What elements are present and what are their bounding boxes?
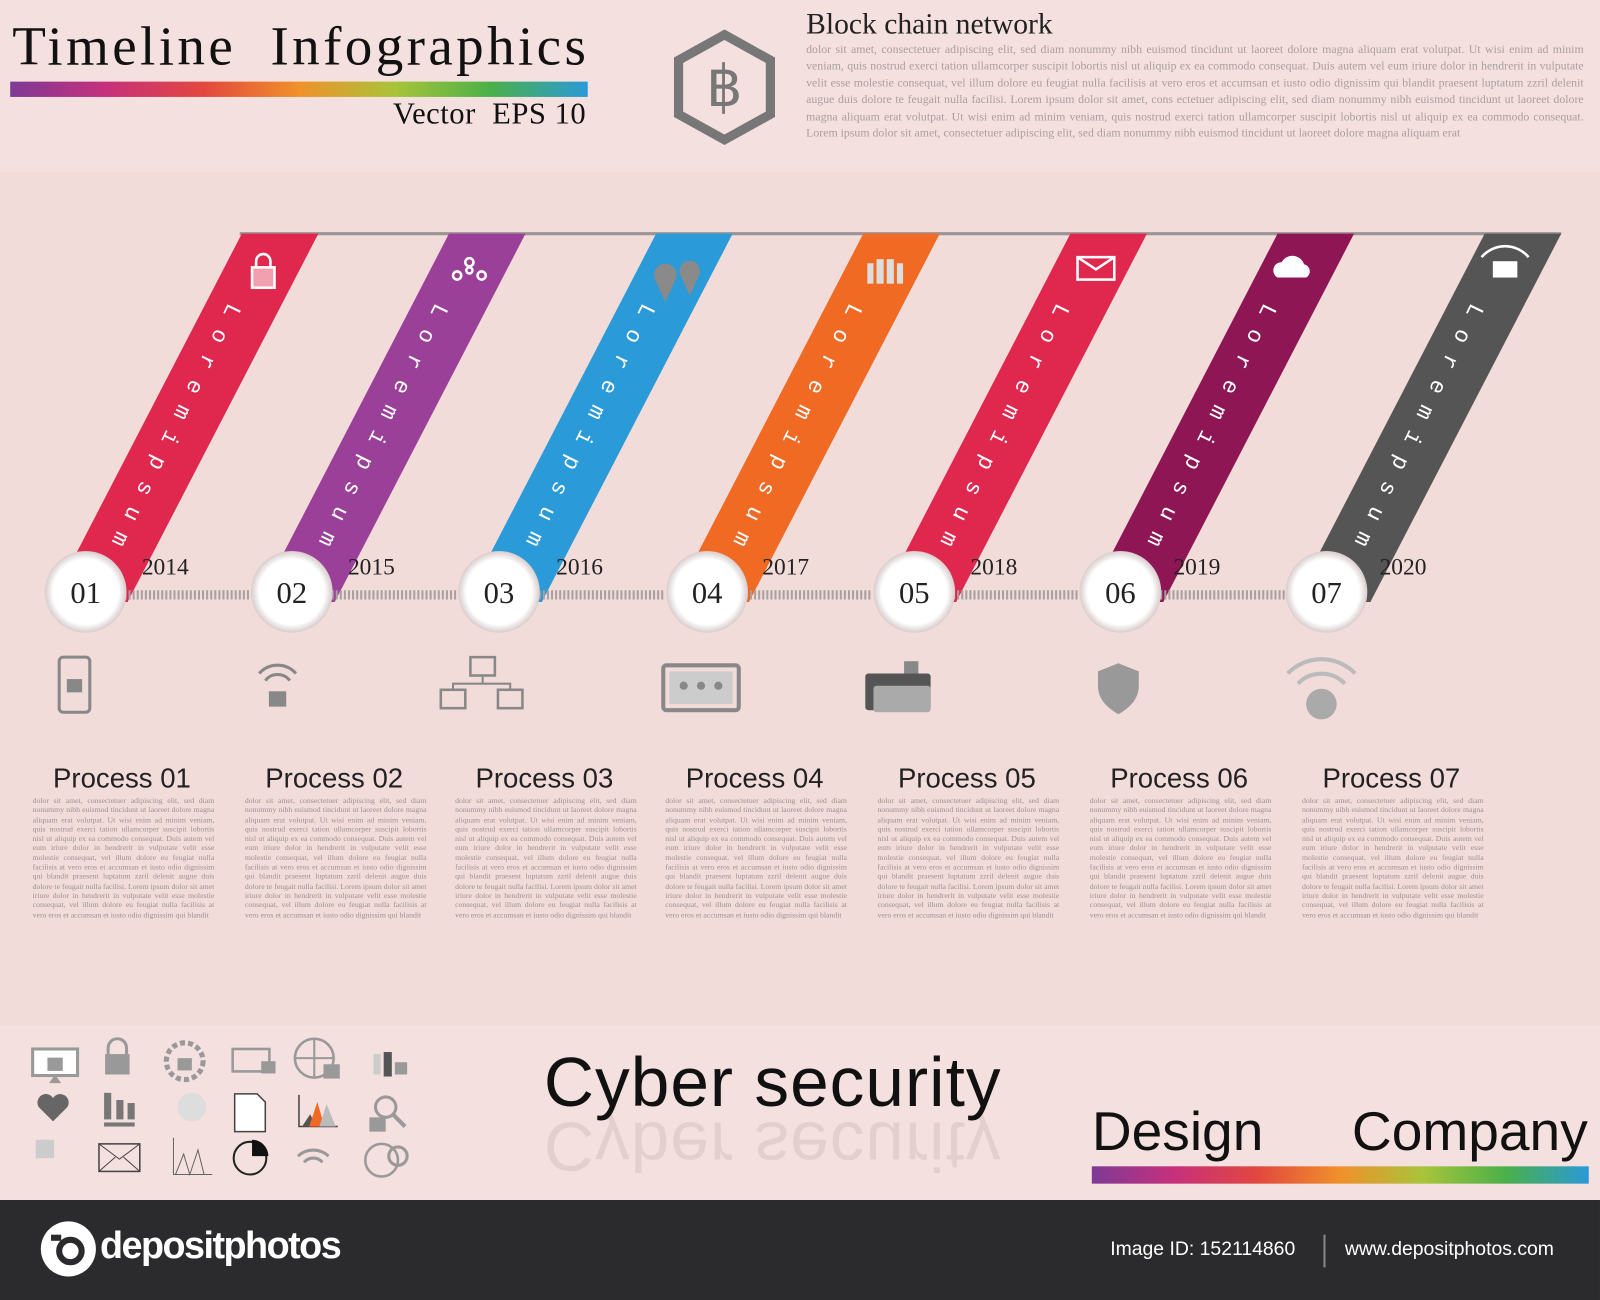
icon grid <box>31 1037 409 1178</box>
ribbons <box>51 234 1561 602</box>
years <box>142 554 1426 580</box>
process icons <box>59 657 1355 719</box>
process 1 <box>32 763 214 919</box>
years: 2018 <box>970 554 1017 580</box>
numbers: 03 <box>484 576 514 610</box>
text: dolor sit amet, consectetuer adipiscing elit, sed diam nonummy nibh euismod tincidunt ut laoreet dolore magna aliquam erat volutpat. Ut wisi enim ad minim veniam, quis nostrud exerci tation ullamcorper suscipit lobortis nisl ut aliquip ex ea commodo consequat. Duis autem vel eum iriure dolor in hendrerit in vulputate velit esse molestie consequat, vel illum dolore eu feugiat nulla facilisis at vero eros et accumsan et iusto odio dignissim qui blandit praesent luptatum zzril delenit augue duis dolore te feugait nulla facilisi. Lorem ipsum dolor sit amet iriure dolor in hendrerit in vulputate velit esse molestie consequat, vel illum dolore eu feugiat nulla facilisis at vero eros et accumsan et iusto odio dignissim qui blandit <box>245 796 427 919</box>
top line <box>240 232 1561 235</box>
title gradient bar <box>10 82 588 97</box>
text: Process 06 <box>1110 763 1248 794</box>
text: Process 04 <box>686 763 824 794</box>
text: dolor sit amet, consectetuer adipiscing elit, sed diam nonummy nibh euismod tincidunt ut laoreet dolore magna aliquam erat volutpat. Ut wisi enim ad minim veniam, quis nostrud exerci tation ullamcorper suscipit lobortis nisl ut aliquip ex ea commodo consequat. Duis autem vel eum iriure dolor in hendrerit in vulputate velit esse molestie consequat, vel illum dolore eu feugiat nulla facilisis at vero eros et accumsan et iusto odio dignissim qui blandit praesent luptatum zzril delenit augue duis dolore te feugait nulla facilisi. Lorem ipsum dolor sit amet iriure dolor in hendrerit in vulputate velit esse molestie consequat, vel illum dolore eu feugiat nulla facilisis at vero eros et accumsan et iusto odio dignissim qui blandit <box>33 796 214 919</box>
text: dolor sit amet, consectetuer adipiscing elit, sed diam nonummy nibh euismod tincidunt ut laoreet dolore magna aliquam erat volutpat. Ut wisi enim ad minim veniam, quis nostrud exerci tation ullamcorper suscipit lobortis nisl ut aliquip ex ea commodo consequat. Duis autem vel eum iriure dolor in hendrerit in vulputate velit esse molestie consequat, vel illum dolore eu feugiat nulla facilisis at vero eros et accumsan et iusto odio dignissim qui blandit praesent luptatum zzril delenit augue duis dolore te feugait nulla facilisi. Lorem ipsum dolor sit amet iriure dolor in hendrerit in vulputate velit esse molestie consequat, vel illum dolore eu feugiat nulla facilisis at vero eros et accumsan et iusto odio dignissim qui blandit <box>1302 796 1484 919</box>
url: www.depositphotos.com <box>1345 1239 1554 1260</box>
ribbon labels: Loremipsum <box>312 299 453 551</box>
years: 2019 <box>1173 554 1220 580</box>
numbers: 02 <box>277 576 307 610</box>
block chain heading: Block chain network <box>806 8 1053 41</box>
timeline chart <box>45 232 1562 720</box>
ribbon labels: Loremipsum <box>519 299 660 551</box>
title: Timeline Infographics <box>12 15 589 77</box>
numbers: 07 <box>1311 576 1342 610</box>
icon: bitcoin hexagon <box>674 30 775 145</box>
ribbon labels: Loremipsum <box>934 299 1074 551</box>
design company: Company <box>1352 1101 1588 1162</box>
text: dolor sit amet, consectetuer adipiscing elit, sed diam nonummy nibh euismod tincidunt ut laoreet dolore magna aliquam erat volutpat. Ut wisi enim ad minim veniam, quis nostrud exerci tation ullamcorper suscipit lobortis nisl ut aliquip ex ea commodo consequat. Duis autem vel eum iriure dolor in hendrerit in vulputate velit esse molestie consequat, vel illum dolore eu feugiat nulla facilisis at vero eros et accumsan et iusto odio dignissim qui blandit praesent luptatum zzril delenit augue duis dolore te feugait nulla facilisi. Lorem ipsum dolor sit amet iriure dolor in hendrerit in vulputate velit esse molestie consequat, vel illum dolore eu feugiat nulla facilisis at vero eros et accumsan et iusto odio dignissim qui blandit <box>455 796 637 919</box>
process 2 <box>245 763 427 919</box>
text: Process 07 <box>1322 763 1460 794</box>
ribbon labels <box>105 299 1488 551</box>
icon: bitcoin hexagon: ฿ <box>706 56 743 119</box>
design company: Design <box>1092 1101 1263 1162</box>
numbers: 01 <box>70 576 101 610</box>
numbers: 04 <box>692 576 722 610</box>
text: dolor sit amet, consectetuer adipiscing elit, sed diam nonummy nibh euismod tincidunt ut laoreet dolore magna aliquam erat volutpat. Ut wisi enim ad minim veniam, quis nostrud exerci tation ullamcorper suscipit lobortis nisl ut aliquip ex ea commodo consequat. Duis autem vel eum iriure dolor in hendrerit in vulputate velit esse molestie consequat, vel illum dolore eu feugiat nulla facilisis at vero eros et accumsan et iusto odio dignissim qui blandit praesent luptatum zzril delenit augue duis dolore te feugait nulla facilisi. Lorem ipsum dolor sit amet iriure dolor in hendrerit in vulputate velit esse molestie consequat, vel illum dolore eu feugiat nulla facilisis at vero eros et accumsan et iusto odio dignissim qui blandit <box>878 796 1059 919</box>
subtitle: Vector EPS 10 <box>393 97 586 131</box>
text: dolor sit amet, consectetuer adipiscing elit, sed diam nonummy nibh euismod tincidunt ut laoreet dolore magna aliquam erat volutpat. Ut wisi enim ad minim veniam, quis nostrud exerci tation ullamcorper suscipit lobortis nisl ut aliquip ex ea commodo consequat. Duis autem vel eum iriure dolor in hendrerit in vulputate velit esse molestie consequat, vel illum dolore eu feugiat nulla facilisis at vero eros et accumsan et iusto odio dignissim qui blandit praesent luptatum zzril delenit augue duis dolore te feugait nulla facilisi. Lorem ipsum dolor sit amet iriure dolor in hendrerit in vulputate velit esse molestie consequat, vel illum dolore eu feugiat nulla facilisis at vero eros et accumsan et iusto odio dignissim qui blandit <box>665 796 847 919</box>
image id: Image ID: 152114860 <box>1110 1239 1295 1260</box>
numbers: 05 <box>899 576 930 610</box>
text: Process 03 <box>476 763 613 794</box>
ribbon labels: Loremipsum <box>727 299 867 551</box>
process 6 <box>1090 763 1272 919</box>
bottom band <box>0 1026 1600 1200</box>
text: Process 05 <box>898 763 1036 794</box>
ribbon labels: Loremipsum <box>1348 299 1488 551</box>
process 4 <box>665 763 847 919</box>
process 7 <box>1302 763 1484 919</box>
bottom gradient bar <box>1092 1166 1589 1184</box>
years: 2020 <box>1380 554 1426 580</box>
ribbon icons <box>252 246 1529 302</box>
header band <box>0 0 1600 171</box>
circles <box>45 551 1367 633</box>
numbers <box>70 576 1342 610</box>
process 5 <box>878 763 1059 919</box>
logo <box>40 1221 340 1276</box>
years: 2014 <box>142 554 189 580</box>
text: Process 01 <box>53 763 191 794</box>
design company <box>1092 1101 1588 1162</box>
text: Process 02 <box>265 763 403 794</box>
years: 2015 <box>348 554 395 580</box>
ribbon labels: Loremipsum <box>1141 299 1281 551</box>
logo: depositphotos <box>100 1224 340 1266</box>
process 3 <box>455 763 637 919</box>
numbers: 06 <box>1105 576 1136 610</box>
dotted connectors <box>124 590 1287 599</box>
years: 2016 <box>556 554 603 580</box>
years: 2017 <box>762 554 809 580</box>
text: dolor sit amet, consectetuer adipiscing elit, sed diam nonummy nibh euismod tincidunt ut laoreet dolore magna aliquam erat volutpat. Ut wisi enim ad minim veniam, quis nostrud exerci tation ullamcorper suscipit lobortis nisl ut aliquip ex ea commodo consequat. Duis autem vel eum iriure dolor in hendrerit in vulputate velit esse molestie consequat, vel illum dolore eu feugiat nulla facilisis at vero eros et accumsan et iusto odio dignissim qui blandit praesent luptatum zzril delenit augue duis dolore te feugait nulla facilisi. Lorem ipsum dolor sit amet iriure dolor in hendrerit in vulputate velit esse molestie consequat, vel illum dolore eu feugiat nulla facilisis at vero eros et accumsan et iusto odio dignissim qui blandit <box>1090 796 1271 919</box>
footer <box>0 1200 1600 1300</box>
ribbon labels: Loremipsum <box>105 299 246 551</box>
block chain text: dolor sit amet, consectetuer adipiscing elit, sed diam nonummy nibh euismod tincidunt ut laoreet dolore magna aliquam erat volutpat. Ut wisi enim ad minim veniam, quis nostrud exerci tation ullamcorper suscipit lobortis nisl ut aliquip ex ea commodo consequat. Duis autem vel eum iriure dolor in hendrerit in vulputate velit esse molestie consequat, vel illum dolore eu feugiat nulla facilisis at vero eros et accumsan et iusto odio dignissim qui blandit praesent luptatum zzril delenit augue duis dolore te feugait nulla facilisi. Lorem ipsum dolor sit amet, cons ectetuer adipiscing elit, sed diam nonummy nibh euismod tincidunt ut laoreet dolore magna aliquam erat volutpat. Ut wisi enim ad minim veniam, quis nostrud exerci tation ullamcorper suscipit lobortis nisl ut aliquip ex ea commodo consequat. Lorem ipsum dolor sit amet, consectetuer adipiscing elit, sed diam nonummy nibh euismod tincidunt ut laoreet dolore magna aliquam erat <box>806 43 1584 140</box>
cyber security heading: Cyber security <box>544 1044 1002 1121</box>
